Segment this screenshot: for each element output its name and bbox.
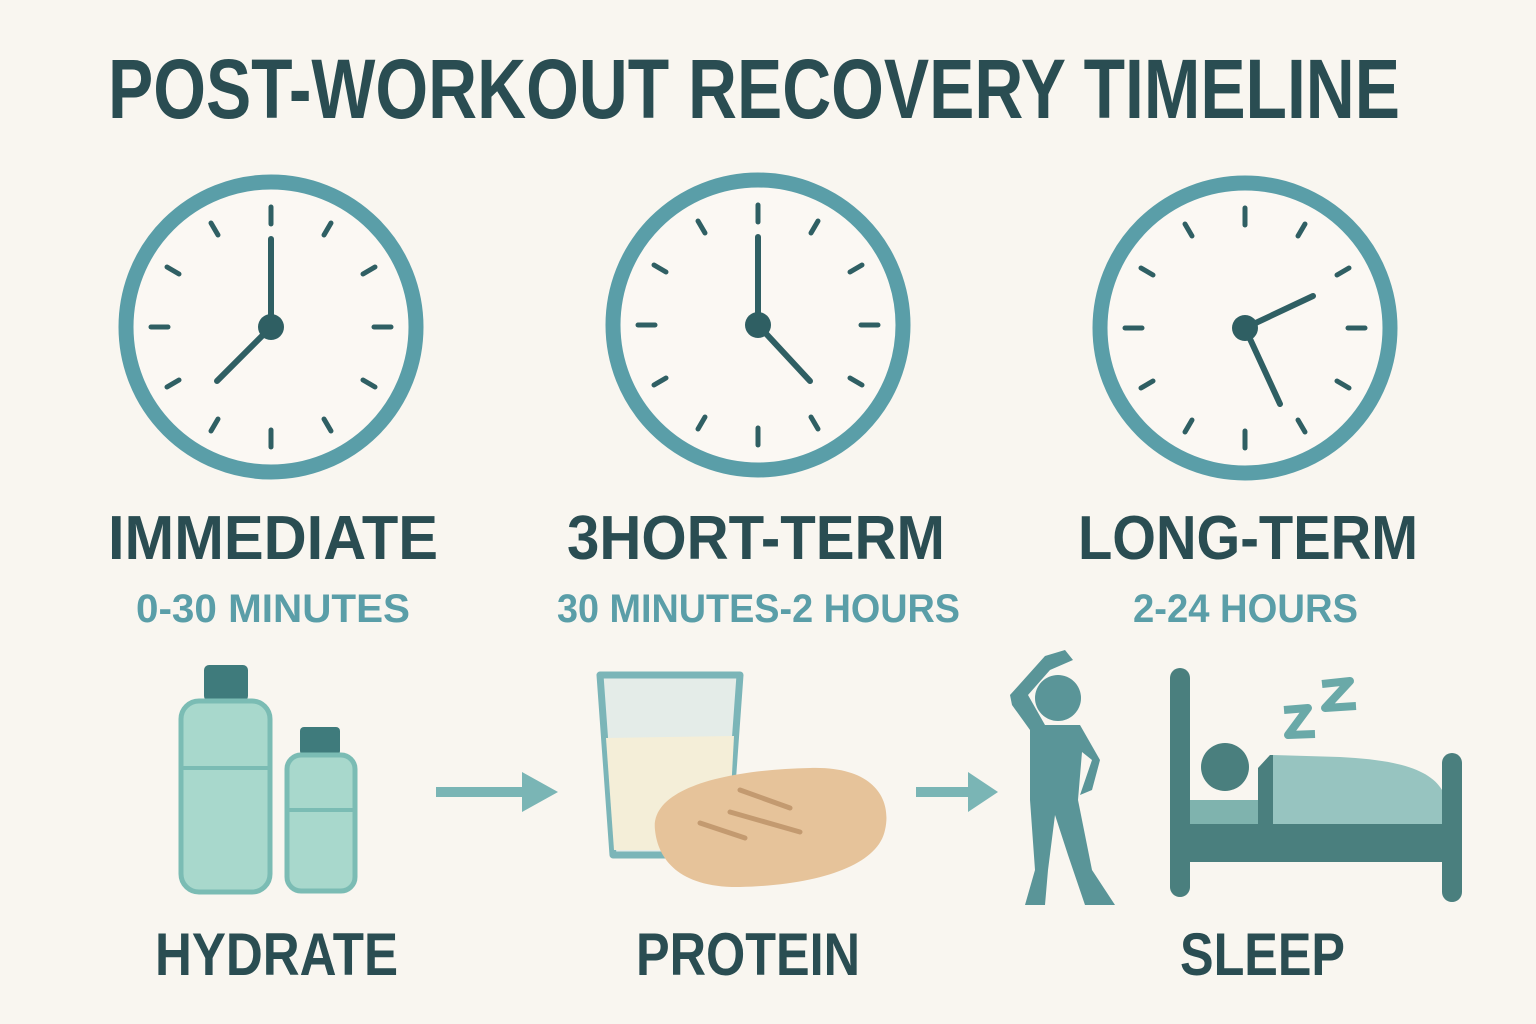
clock: short-term <box>613 180 903 470</box>
arrow 1 <box>436 772 558 812</box>
label: protein: PROTEIN <box>636 921 860 988</box>
sublabel: 2-24 hours: 2-24 HOURS <box>1133 587 1358 631</box>
clock: immediate <box>126 182 416 472</box>
icon: stretching person <box>1010 650 1115 905</box>
label: immediate: IMMEDIATE <box>108 504 438 573</box>
icon: bed with sleeping person <box>1170 668 1462 902</box>
arrow 2 <box>916 772 998 812</box>
icon: milk glass and chicken <box>600 675 886 887</box>
label: short-term: 3HORT-TERM <box>567 504 945 573</box>
label: sleep: SLEEP <box>1180 921 1345 988</box>
label: long-term: LONG-TERM <box>1078 504 1418 573</box>
sublabel: 30 minutes-2 hours: 30 MINUTES-2 HOURS <box>557 587 960 631</box>
icon: water bottles <box>181 665 355 892</box>
clock: long-term <box>1100 183 1390 473</box>
label: hydrate: HYDRATE <box>155 921 398 988</box>
sublabel: 0-30 minutes: 0-30 MINUTES <box>136 587 410 631</box>
